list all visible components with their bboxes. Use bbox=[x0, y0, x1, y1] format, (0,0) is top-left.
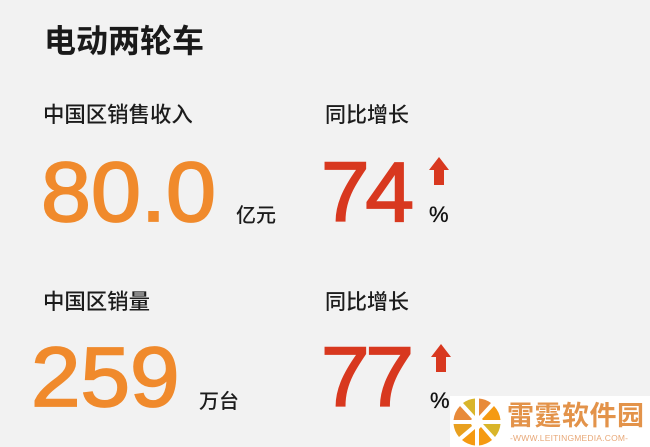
metric: revenue value: 80.0 bbox=[41, 145, 216, 239]
label: China sales volume: 中国区销量 bbox=[43, 290, 150, 314]
logo url: -WWW.LEITINGMEDIA.COM- bbox=[510, 433, 628, 443]
metric: revenue growth: 74 bbox=[321, 145, 410, 239]
title: 电动两轮车 bbox=[44, 23, 204, 59]
unit: 10 thousand units: 万台 bbox=[199, 391, 239, 413]
metric: sales growth: 77 bbox=[321, 330, 410, 424]
logo name: 雷霆软件园 bbox=[507, 401, 644, 431]
percent sign: revenue growth: % bbox=[429, 202, 449, 227]
percent sign: sales growth: % bbox=[430, 388, 450, 413]
metric: sales volume value: 259 bbox=[31, 330, 180, 424]
unit: 100 million yuan: 亿元 bbox=[236, 205, 276, 227]
icon: orange slice bbox=[454, 398, 500, 446]
icon: revenue up arrow bbox=[429, 157, 449, 185]
watermark logo bbox=[450, 396, 650, 447]
label: revenue year-on-year growth: 同比增长 bbox=[325, 104, 409, 127]
label: China revenue: 中国区销售收入 bbox=[43, 103, 193, 127]
label: sales year-on-year growth: 同比增长 bbox=[325, 291, 409, 314]
icon: sales up arrow bbox=[431, 344, 451, 372]
